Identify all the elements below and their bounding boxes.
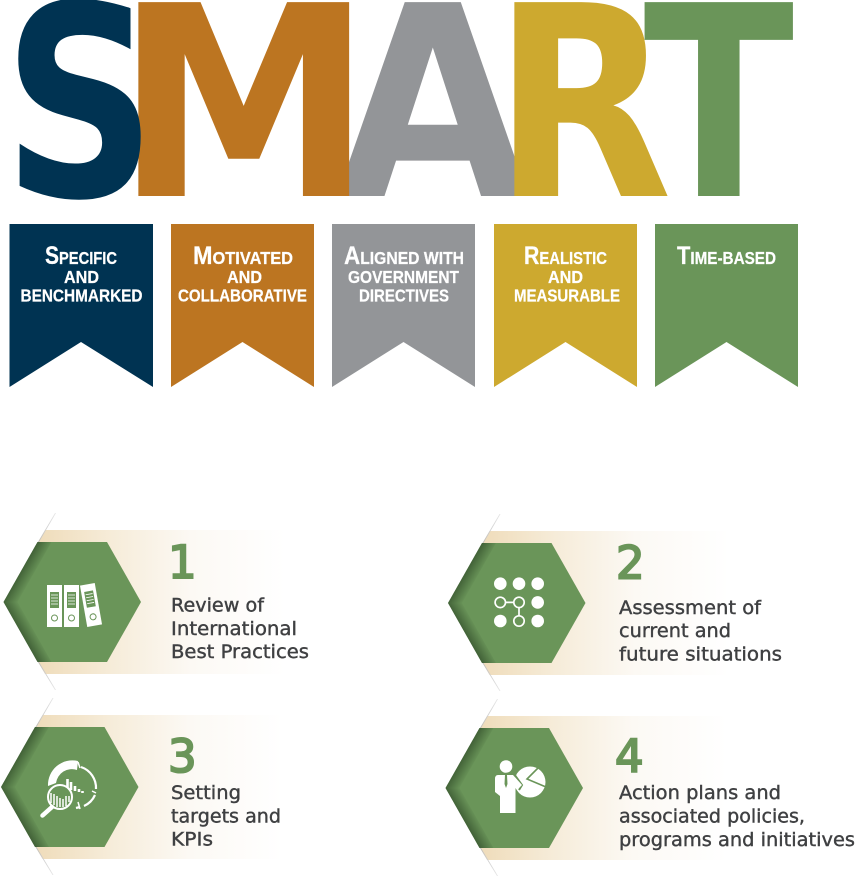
title: SMART [3,0,794,260]
icon: dot grid [494,577,544,627]
ribbon: aligned with government directives [332,224,475,387]
text: setting targets and kpis: KPIs [171,828,213,850]
text: assessment of current and future situations [619,597,782,666]
text: action plans: programs and initiatives [619,829,855,851]
ribbon: motivated and collaborative: COLLABORATIVE [178,286,307,306]
text: action plans: Action plans and [619,782,781,804]
ribbon: aligned with government directives: GOVERNMENT [348,267,459,287]
panel: step 3 [1,698,282,875]
text: setting targets and kpis: Setting [171,782,241,804]
panel: step 4 [446,699,855,876]
text: review of international best practices: International [171,618,297,640]
ribbon: aligned with government directives: DIRECTIVES [359,286,449,306]
text: setting targets and kpis [171,782,281,850]
ribbon: specific and benchmarked: BENCHMARKED [20,286,142,306]
ribbon: specific and benchmarked [10,224,153,387]
ribbon: specific and benchmarked: SPECIFIC [45,242,117,270]
number 2: 2 [616,536,645,590]
panel: step 1 [4,513,309,690]
text: review of international best practices: Best Practices [171,641,309,663]
ribbon: realistic and measurable: MEASURABLE [514,286,620,306]
panel: step 2 [448,514,782,691]
ribbon: realistic and measurable: AND [548,267,583,287]
icon: magnifier over charts [42,760,96,816]
icon: presenter with pie chart [495,760,546,813]
ribbon: aligned with government directives: ALIGNED WITH [344,242,464,270]
text: review of international best practices: Review of [171,594,265,616]
ribbon: realistic and measurable [494,224,637,387]
text: assessment of current and future situations: current and [619,620,731,642]
ribbon: motivated and collaborative: MOTIVATED [193,242,293,270]
text: action plans: associated policies, [619,806,805,828]
icon: binders [47,583,102,627]
ribbon: motivated and collaborative [171,224,314,387]
text: setting targets and kpis: targets and [171,806,281,828]
number 3: 3 [168,730,197,783]
ribbon: time-based: TIME-BASED [677,242,776,270]
text: assessment of current and future situations: Assessment of [619,597,762,619]
ribbon: motivated and collaborative: AND [227,267,262,287]
ribbon: realistic and measurable: REALISTIC [524,242,607,270]
ribbon: time-based [655,224,798,387]
text: action plans [619,782,855,851]
number 4: 4 [615,730,644,783]
ribbon: specific and benchmarked: AND [64,267,99,287]
text: review of international best practices [171,594,309,663]
text: assessment of current and future situations: future situations [619,644,782,666]
number 1: 1 [168,536,197,589]
